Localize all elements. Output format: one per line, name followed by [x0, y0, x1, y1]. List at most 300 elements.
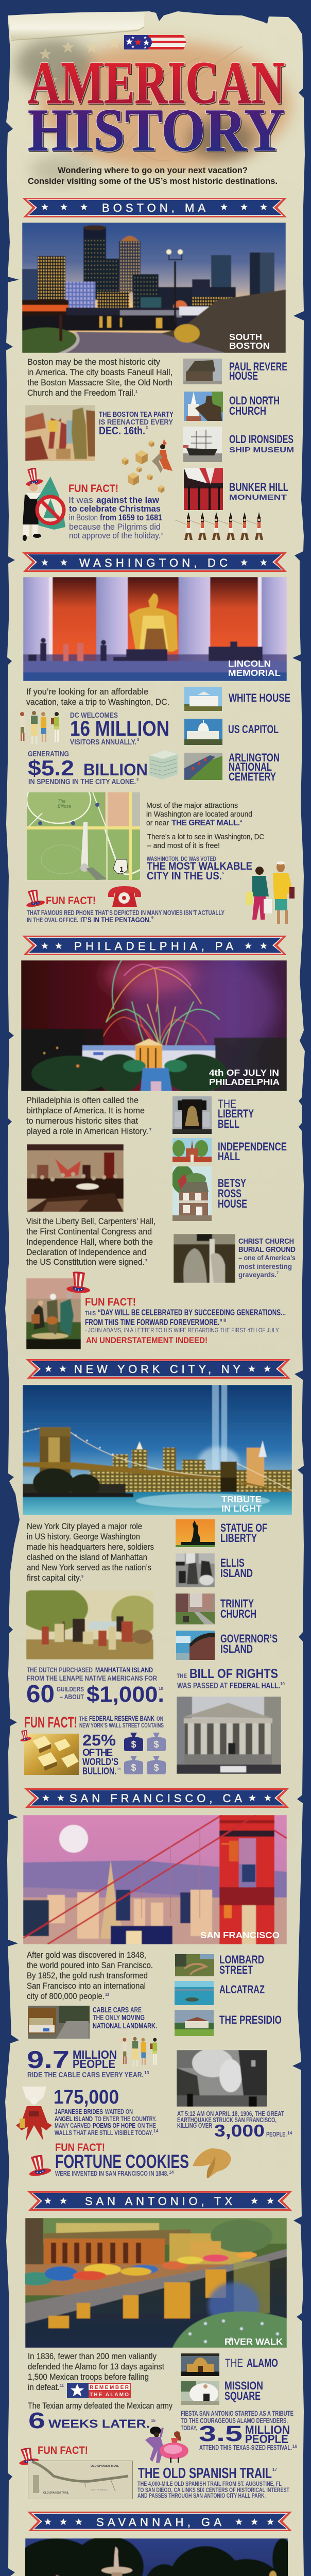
text block: Philadelphia sites: 7: [145, 1258, 147, 1263]
stat: 175,000 brides: [54, 2087, 159, 2137]
stat: 6 weeks later: WEEKS LATER.: [48, 2417, 150, 2430]
text block: Philadelphia sites: the First Continental Congress and: [26, 1227, 152, 1236]
text block: San Francisco intro: the world poured into San Francisco.: [27, 1961, 153, 1970]
stat: Fiesta 3.5 million: TODAY,: [181, 2424, 197, 2432]
attraction: Betsy Ross House: BETSY: [218, 1177, 246, 1190]
attraction: Lombard Street: [175, 1953, 264, 1976]
attraction: Old North Church: CHURCH: [229, 404, 266, 417]
attraction: Ellis Island: ISLAND: [220, 1567, 253, 1580]
text block: Philadelphia intro: Philadelphia is often called the: [26, 1096, 139, 1105]
banner: Boston, MA: [22, 198, 287, 217]
text: cable cars landmark: NATIONAL LANDMARK.: [93, 2022, 157, 2030]
fun fact: gold bullion: [19, 1714, 166, 1777]
text block: San Francisco intro: After gold was discovered in 1848,: [27, 1951, 146, 1960]
text block: Boston intro: 1: [135, 389, 137, 394]
caption: LINCOLN: [228, 658, 271, 669]
text block: New York intro: and New York served as the nation’s: [27, 1563, 151, 1572]
attraction: Independence Hall: HALL: [218, 1150, 240, 1163]
icon: tourists: [20, 711, 59, 744]
attraction: Arlington National Cemetery: NATIONAL: [229, 760, 272, 773]
text: most walkable city: CITY IN THE US.: [147, 870, 222, 882]
attraction: Paul Revere House: PAUL REVERE: [229, 360, 287, 373]
text: Great Mall: THE GREAT MALL.: [171, 819, 240, 827]
stat: $5.2 billion spending: GENERATING: [28, 750, 69, 758]
map: the Great Mall area: [27, 776, 140, 880]
icon: Remember the Alamo flag: [67, 2383, 131, 2398]
text block: Boston intro: [27, 358, 172, 398]
attraction: The Alamo: THE: [225, 2357, 243, 2369]
map: the Great Mall area: 1: [119, 865, 124, 873]
text: Christmas fact: to celebrate Christmas: [69, 504, 161, 514]
caption: SOUTH: [229, 332, 262, 342]
text block: San Francisco intro: 12: [105, 1992, 109, 1997]
text: Christmas fact: in Boston: [69, 513, 98, 522]
painting: purchase of Manhattan: [16, 1585, 158, 1659]
text: red phone fact: IT’S IN THE PENTAGON.: [80, 916, 151, 924]
text: fortune cookies fact: FORTUNE COOKIES: [55, 2151, 189, 2172]
stat: 175,000 brides: ANGEL ISLAND: [55, 2115, 93, 2123]
subtitle: Wondering where to go on your next vacation?: [58, 166, 248, 175]
attraction: Betsy Ross House: HOUSE: [218, 1197, 247, 1210]
painting: Spirit of '76: [26, 1278, 81, 1349]
text block: Alamo history: defended the Alamo for 13 days against: [28, 2362, 164, 2371]
attraction: Alcatraz: ALCATRAZ: [219, 1983, 265, 1996]
text block: New York intro: in US history. George Washington: [27, 1532, 140, 1541]
stat: 175,000 brides: TO ENTER THE COUNTRY.: [95, 2115, 157, 2123]
stat: $5.2 billion spending: $5.2: [28, 756, 74, 780]
caption: [209, 1067, 280, 1087]
attraction: Christ Church Burial Ground: graveyards.: [238, 1270, 277, 1279]
attraction: Statue of Liberty: STATUE OF: [220, 1521, 267, 1534]
photo: Forsyth Park Fountain: [10, 2536, 293, 2576]
text block: Boston intro: the Boston Massacre Site, the Old North: [27, 378, 172, 387]
text block: Alamo history: [28, 2352, 164, 2392]
attraction: Bunker Hill: BUNKER HILL: [229, 481, 288, 494]
attraction: White House: [184, 687, 290, 711]
text block: DC intro: [26, 687, 169, 707]
title: [28, 49, 286, 165]
attraction: Christ Church Burial Ground: 7: [277, 1270, 279, 1275]
banner: Savannah, GA: SAVANNAH, GA: [96, 2516, 221, 2529]
text block: Boston intro: Boston may be the most historic city: [27, 358, 161, 367]
text: Great Mall: or near: [146, 819, 169, 827]
attraction: The Presidio: THE PRESIDIO: [219, 2013, 282, 2026]
text block: Philadelphia sites: Visit the Liberty Bell, Carpenters’ Hall,: [26, 1217, 156, 1226]
text: Christmas fact: against the law: [96, 495, 160, 505]
text block: San Francisco intro: San Francisco into an international: [27, 1981, 146, 1991]
attraction: Arlington National Cemetery: CEMETERY: [229, 770, 276, 783]
text block: San Francisco intro: city of 800,000 people.: [27, 1992, 105, 2001]
banner: Savannah, GA: [27, 2512, 292, 2531]
stat: Manhattan purchase price: [26, 1666, 164, 1708]
text: most is free: – and most of it is free!: [147, 841, 220, 850]
banner: New York City, NY: NEW YORK CITY, NY: [74, 1363, 240, 1376]
fun fact: John Adams: FROM THIS TIME FORWARD FOREVERMORE.”: [85, 1317, 222, 1327]
panel: Savannah: [10, 2512, 296, 2576]
attraction: Liberty Bell: [172, 1096, 254, 1134]
stat: 16 million visitors: VISITORS ANNUALLY.: [70, 738, 136, 747]
fun fact: red phone: [23, 886, 225, 924]
text: red phone fact: THAT FAMOUS RED PHONE THAT’S DEPICTED IN MANY MOVIES ISN’T ACTUALLY: [27, 909, 225, 917]
text: Old Spanish Trail fact: AND PASSES THROUGH SAN ANTONIO CITY HALL PARK.: [137, 2492, 266, 2499]
map: Old Spanish Trail: GULF OF MEXICO: [91, 2488, 108, 2491]
panel: Washington DC: [20, 552, 295, 924]
text: fortune cookies fact: FUN FACT!: [55, 2142, 105, 2154]
icon: flag emblem: [124, 35, 186, 49]
text: fortune cookies fact: WERE INVENTED IN SAN FRANCISCO IN 1848.: [55, 2170, 168, 2177]
text: Boston Tea Party reenacted: DEC. 16th.: [99, 425, 145, 437]
attraction: Governor's Island: ISLAND: [220, 1642, 253, 1655]
icon: hat: [16, 2446, 39, 2466]
map: the Great Mall area: Ellipse: [58, 804, 72, 809]
text: Federal Reserve: FEDERAL RESERVE BANK: [89, 1715, 154, 1722]
text block: Alamo history: in defeat.: [28, 2383, 60, 2392]
text block: New York intro: made his headquarters here, soldiers: [27, 1543, 154, 1552]
text: Great Mall: in Washington are located around: [146, 810, 252, 819]
photo: South Boston skyline: [22, 223, 286, 353]
attraction: Paul Revere House: [183, 359, 287, 384]
caption: PHILADELPHIA: [209, 1077, 280, 1087]
attraction: Statue of Liberty: [176, 1519, 267, 1547]
text: Great Mall: [146, 801, 252, 827]
caption: MEMORIAL: [228, 668, 281, 678]
banner: Washington, DC: WASHINGTON, DC: [79, 556, 228, 569]
attraction: Alcatraz: [175, 1981, 265, 2005]
panel: Boston: [22, 198, 294, 541]
photo: Tribute in Light: [23, 1385, 292, 1515]
banner: Washington, DC: [22, 552, 287, 572]
attraction: Christ Church Burial Ground: [174, 1234, 296, 1283]
stat: 9.7 million riders: 13: [144, 2070, 149, 2075]
photo: Golden Gate and San Francisco: [23, 1815, 287, 1944]
text: Boston Tea Party reenacted: IS REENACTED EVERY: [99, 418, 173, 427]
text: Federal Reserve: [79, 1715, 164, 1729]
text: most is free: There’s a lot to see in Washington, DC: [147, 833, 264, 841]
caption: TRIBUTE: [221, 1494, 262, 1504]
stat: Fiesta 3.5 million: 16: [292, 2444, 297, 2449]
heading: fun fact: FUN FACT!: [24, 1714, 77, 1731]
panel: New York City: [16, 1359, 292, 1777]
attraction: Governor's Island: [176, 1631, 278, 1660]
stat: Bill of Rights: WAS PASSED AT: [177, 1682, 228, 1690]
attraction: Independence Hall: INDEPENDENCE: [218, 1140, 287, 1153]
attraction: Christ Church Burial Ground: – one of America’s: [238, 1253, 296, 1262]
stat: 9.7 million riders: PEOPLE: [73, 2057, 115, 2071]
stat: $5.2 billion spending: BILLION: [83, 760, 148, 779]
stat: 3,000 killed: KILLING OVER: [177, 2122, 212, 2129]
stat: 16 million visitors: [70, 711, 169, 747]
text: Christmas fact: because the Pilgrims did: [69, 522, 161, 532]
icon: Remember the Alamo flag: THE ALAMO: [90, 2392, 129, 2398]
text: Christmas fact: 2: [161, 532, 163, 536]
attraction: Old North Church: OLD NORTH: [229, 394, 280, 407]
photo: cable car: [28, 2006, 90, 2039]
text block: Philadelphia intro: to numerous historic sites that: [26, 1116, 138, 1126]
stat: 6 weeks later: The Texian army defeated the Mexican army: [28, 2401, 173, 2411]
text block: Philadelphia intro: [26, 1096, 151, 1136]
caption: [229, 332, 270, 351]
icon: hat: [62, 1266, 95, 1298]
icon: tea crates and figure: [122, 439, 172, 493]
stat: Bill of Rights: BILL OF RIGHTS: [189, 1667, 278, 1681]
fun fact: Christmas banned: [23, 466, 163, 541]
text: fortune cookies fact: [55, 2142, 189, 2177]
fun fact: John Adams: [85, 1296, 286, 1345]
attraction: US Capitol: [184, 719, 279, 745]
text: Christmas fact: not approve of the holiday.: [69, 531, 161, 540]
stat: 16 million visitors: DC WELCOMES: [70, 711, 118, 720]
attraction: Ellis Island: ELLIS: [220, 1556, 245, 1569]
banner: San Francisco, CA: [24, 1788, 289, 1808]
heading: fun fact: FUN FACT!: [46, 895, 96, 907]
icon: tourists: [123, 2037, 157, 2066]
chart: money bags one in four: [124, 1733, 166, 1774]
stat: 175,000 brides: WAITED ON: [105, 2108, 133, 2115]
text block: Philadelphia sites: the US Constitution were signed.: [26, 1258, 145, 1267]
stat: 25% of world's bullion: 11: [117, 1767, 121, 1771]
stat: Bill of Rights: THE: [177, 1672, 187, 1680]
text: most is free: [147, 833, 264, 850]
attraction: Arlington National Cemetery: ARLINGTON: [229, 751, 280, 764]
attraction: Lombard Street: LOMBARD: [219, 1953, 264, 1966]
text block: Boston intro: in America. The city boasts Faneuil Hall,: [27, 368, 172, 377]
text: Christmas fact: [68, 483, 163, 540]
icon: folk dancers: [145, 2427, 188, 2463]
text: Federal Reserve: NEW YORK’S WALL STREET CONTAINS: [79, 1722, 164, 1729]
text block: Philadelphia sites: Independence Hall, where both the: [26, 1238, 153, 1247]
attraction: Independence Hall: [172, 1138, 287, 1163]
attraction: Bunker Hill: [184, 468, 288, 510]
panel: San Antonio: [16, 2191, 297, 2499]
text: most walkable city: THE MOST WALKABLE: [147, 860, 252, 872]
attraction: Christ Church Burial Ground: most interesting: [238, 1262, 292, 1270]
stat: Manhattan purchase price: THE DUTCH PURCHASED: [27, 1666, 93, 1674]
text: Old Spanish Trail fact: [137, 2465, 290, 2499]
text block: Alamo history: 11: [60, 2383, 64, 2388]
panel: San Francisco: [16, 1788, 292, 2178]
stat: 175,000 brides: WALLS THAT ARE STILL VISIBLE TODAY.: [55, 2129, 153, 2137]
photo: gold bars: [24, 1734, 79, 1775]
stat: 25% of world's bullion: BULLION.: [82, 1766, 116, 1777]
fun fact: John Adams: THIS: [85, 1310, 96, 1317]
icon: pilgrim with crossed-out tree: [23, 466, 65, 541]
attraction: Christ Church Burial Ground: BURIAL GROUND: [238, 1245, 296, 1254]
photo: 4th of July fireworks: [21, 958, 287, 1093]
text block: Alamo history: 1,500 Mexican troops before falling: [28, 2372, 149, 2382]
banner: San Antonio, TX: SAN ANTONIO, TX: [85, 2195, 232, 2208]
icon: Remember the Alamo flag: REMEMBER: [90, 2385, 129, 2391]
title: HISTORY: [28, 96, 285, 164]
text: Boston Tea Party reenacted: THE BOSTON TEA PARTY: [99, 411, 174, 419]
subtitle: [28, 166, 278, 186]
attraction: Liberty Bell: THE: [218, 1097, 236, 1110]
icon: hat: [23, 888, 45, 908]
stat: Fiesta 3.5 million: [181, 2410, 297, 2451]
text: Christmas fact: FUN FACT!: [68, 483, 118, 495]
text: cable cars landmark: ARE: [130, 2006, 142, 2014]
stat: Manhattan purchase price: – ABOUT: [60, 1693, 84, 1701]
photo: River Walk: [18, 2218, 287, 2348]
map: Old Spanish Trail: OLD SPANISH TRAIL: [91, 2465, 119, 2468]
attraction: Betsy Ross House: ROSS: [218, 1187, 241, 1200]
text: cable cars landmark: [93, 2006, 157, 2030]
stat: Bill of Rights: FEDERAL HALL.: [230, 1682, 280, 1690]
text block: Alamo history: In 1836, fewer than 200 men valiantly: [28, 2352, 157, 2361]
text: Federal Reserve: ON: [157, 1715, 163, 1722]
heading: fun fact: FUN FACT!: [38, 2445, 88, 2456]
attraction: Old Ironsides: SHIP MUSEUM: [229, 446, 294, 454]
attraction: Trinity Church: [176, 1594, 256, 1624]
top scroll curl: [8, 12, 145, 40]
text block: Philadelphia intro: birthplace of America. It is home: [26, 1106, 145, 1115]
text: Boston Tea Party reenacted: 2: [146, 425, 148, 430]
text block: New York intro: first capital city.: [27, 1573, 81, 1583]
text block: DC intro: If you’re looking for an affordable: [26, 687, 148, 697]
caption: BOSTON: [229, 341, 270, 351]
map: the Great Mall area: The: [58, 799, 66, 804]
text block: Philadelphia intro: played a role in American History.: [26, 1127, 148, 1136]
map: Old Spanish Trail: [28, 2461, 133, 2499]
caption: RIVER WALK: [224, 2336, 283, 2347]
subtitle: Consider visiting some of the US’s most historic destinations.: [28, 177, 278, 186]
banner: Philadelphia, PA: PHILADELPHIA, PA: [74, 940, 233, 953]
text: most walkable city: WASHINGTON, DC WAS VOTED: [147, 855, 216, 862]
text: cable cars landmark: MOVING: [122, 2014, 145, 2022]
attraction: Paul Revere House: HOUSE: [229, 369, 258, 382]
text: most walkable city: 5: [222, 871, 224, 875]
photo: 1906 earthquake: [177, 2048, 267, 2107]
attraction: Liberty Bell: BELL: [218, 1117, 239, 1130]
text: red phone fact: [27, 909, 225, 924]
stat: 175,000 brides: MANY CARVED: [55, 2122, 91, 2129]
stat: Manhattan purchase price: FROM THE LENAPE NATIVE AMERICANS FOR: [27, 1674, 157, 1682]
attraction: Trinity Church: CHURCH: [220, 1607, 256, 1620]
attraction: Mission Square: MISSION: [224, 2379, 263, 2392]
text: Boston Tea Party reenacted: [99, 411, 174, 437]
text block: New York intro: New York City played a major role: [27, 1522, 142, 1531]
text block: Philadelphia sites: Declaration of Independence and: [26, 1248, 146, 1257]
photo: Federal Hall: [177, 1697, 281, 1774]
text: Christmas fact: It was: [68, 495, 93, 505]
text: cable cars landmark: THE ONLY: [93, 2014, 120, 2022]
stat: Fiesta 3.5 million: PEOPLE: [245, 2432, 288, 2446]
stat: 3,000 killed: EARTHQUAKE STRUCK SAN FRANCISCO,: [177, 2116, 277, 2124]
fun fact: John Adams: 8: [223, 1318, 226, 1323]
text block: Boston intro: Church and the Freedom Trail.: [27, 388, 135, 398]
stat: Bill of Rights: [177, 1667, 285, 1690]
stat: 16 million visitors: 16 MILLION: [70, 716, 169, 740]
text block: Philadelphia sites: [26, 1217, 156, 1267]
attraction: Trinity Church: TRINITY: [220, 1597, 254, 1610]
stat: 3,000 killed: AT 5:12 AM ON APRIL 18, 1906, THE GREAT: [177, 2110, 284, 2117]
painting: Declaration of Independence: [27, 1144, 124, 1212]
photo: Lincoln Memorial: [23, 577, 287, 681]
attraction: Liberty Bell: LIBERTY: [218, 1107, 254, 1120]
text: fortune cookies fact: 14: [169, 2170, 174, 2175]
title: HISTORY: [28, 96, 285, 164]
stat: 16 million visitors: 3: [137, 737, 139, 742]
icon: hat: [19, 1729, 32, 1742]
stat: 175,000 brides: ON THE: [137, 2122, 156, 2129]
attraction: White House: WHITE HOUSE: [229, 691, 290, 704]
text: Great Mall: Most of the major attractions: [146, 801, 238, 810]
caption: [228, 658, 281, 678]
stat: 9.7 million riders: [27, 2046, 149, 2079]
banner: Boston, MA: BOSTON, MA: [102, 201, 205, 214]
attraction: The Alamo: [181, 2353, 278, 2376]
text: Christmas fact: from 1659 to 1681: [100, 513, 162, 522]
stat: 175,000 brides: 14: [153, 2128, 159, 2133]
stat: 9.7 million riders: MILLION: [73, 2048, 117, 2061]
attraction: Mission Square: SQUARE: [224, 2389, 261, 2402]
stat: Manhattan purchase price: 60: [26, 1681, 55, 1708]
fun fact: fortune cookies: [26, 2142, 231, 2178]
icon: hat: [26, 2154, 52, 2177]
icon: money stack: [149, 750, 178, 779]
attraction: The Presidio: [175, 2010, 282, 2036]
stat: Bill of Rights: 10: [280, 1682, 285, 1686]
stat: 25% of world's bullion: OF THE: [82, 1748, 113, 1758]
attraction: Betsy Ross House: [171, 1165, 247, 1221]
attraction: The Alamo: ALAMO: [247, 2357, 278, 2369]
text: Great Mall: 4: [240, 819, 243, 823]
stat: 6 weeks later: [28, 2401, 173, 2433]
stat: 175,000 brides: POEMS OF HOPE: [93, 2122, 135, 2129]
icon: toy soldiers: [175, 512, 263, 540]
attraction: Old Ironsides: [183, 427, 294, 462]
fun fact: John Adams: AN UNDERSTATEMENT INDEED!: [86, 1335, 208, 1345]
banner: San Antonio, TX: [27, 2191, 292, 2211]
attraction: Ellis Island: [176, 1553, 253, 1587]
stat: 175,000 brides: 175,000: [54, 2087, 119, 2108]
fun fact: John Adams: - JOHN ADAMS, IN A LETTER TO HIS WIFE REGARDING THE FIRST 4TH OF JULY.: [85, 1328, 280, 1334]
text block: Philadelphia intro: 7: [149, 1127, 151, 1132]
icon: red phone: [108, 886, 141, 907]
attraction: Bunker Hill: MONUMENT: [229, 493, 287, 502]
stat: 3,000 killed: 3,000: [214, 2121, 265, 2140]
text block: San Francisco intro: By 1852, the gold rush transformed: [27, 1971, 148, 1980]
stat: 25% of world's bullion: WORLD’S: [82, 1757, 118, 1768]
stat: 9.7 million riders: 9.7: [27, 2046, 70, 2073]
stat: 25% of world's bullion: 25%: [82, 1731, 116, 1749]
stat: 9.7 million riders: RIDE THE CABLE CARS EVERY YEAR.: [27, 2071, 144, 2079]
stat: 25% of world's bullion: [82, 1731, 121, 1777]
attraction: US Capitol: US CAPITOL: [228, 723, 279, 736]
stat: $5.2 billion spending: IN SPENDING IN THE CITY ALONE.: [28, 777, 136, 786]
text block: New York intro: 9: [81, 1574, 83, 1579]
text block: New York intro: [27, 1522, 154, 1583]
stat: Manhattan purchase price: $1,000.: [87, 1682, 164, 1707]
caption: SAN FRANCISCO: [200, 1930, 280, 1940]
stat: 3,000 killed: [177, 2110, 292, 2140]
attraction: Christ Church Burial Ground: CHRIST CHURCH: [238, 1237, 294, 1246]
text: cable cars landmark: CABLE CARS: [93, 2006, 129, 2014]
stat: Fiesta 3.5 million: 3.5: [199, 2421, 243, 2446]
banner: Philadelphia, PA: [22, 936, 287, 955]
stat: Manhattan purchase price: GUILDERS: [57, 1685, 84, 1693]
stat: Manhattan purchase price: 10: [159, 1686, 163, 1691]
attraction: Statue of Liberty: LIBERTY: [220, 1532, 257, 1545]
map: Old Spanish Trail: OLD SPANISH TRAIL: [43, 2492, 69, 2495]
text block: New York intro: clashed on the island of Manhattan: [27, 1553, 147, 1562]
stat: Manhattan purchase price: MANHATTAN ISLAND: [95, 1666, 153, 1674]
stat: Fiesta 3.5 million: MILLION: [245, 2423, 290, 2436]
icon: Japanese bride: [16, 2087, 52, 2141]
banner: San Francisco, CA: SAN FRANCISCO, CA: [70, 1792, 242, 1805]
text: red phone fact: IN THE OVAL OFFICE.: [27, 917, 78, 924]
fun fact: Old Spanish Trail: [16, 2445, 290, 2499]
panel: Philadelphia: [21, 936, 296, 1349]
